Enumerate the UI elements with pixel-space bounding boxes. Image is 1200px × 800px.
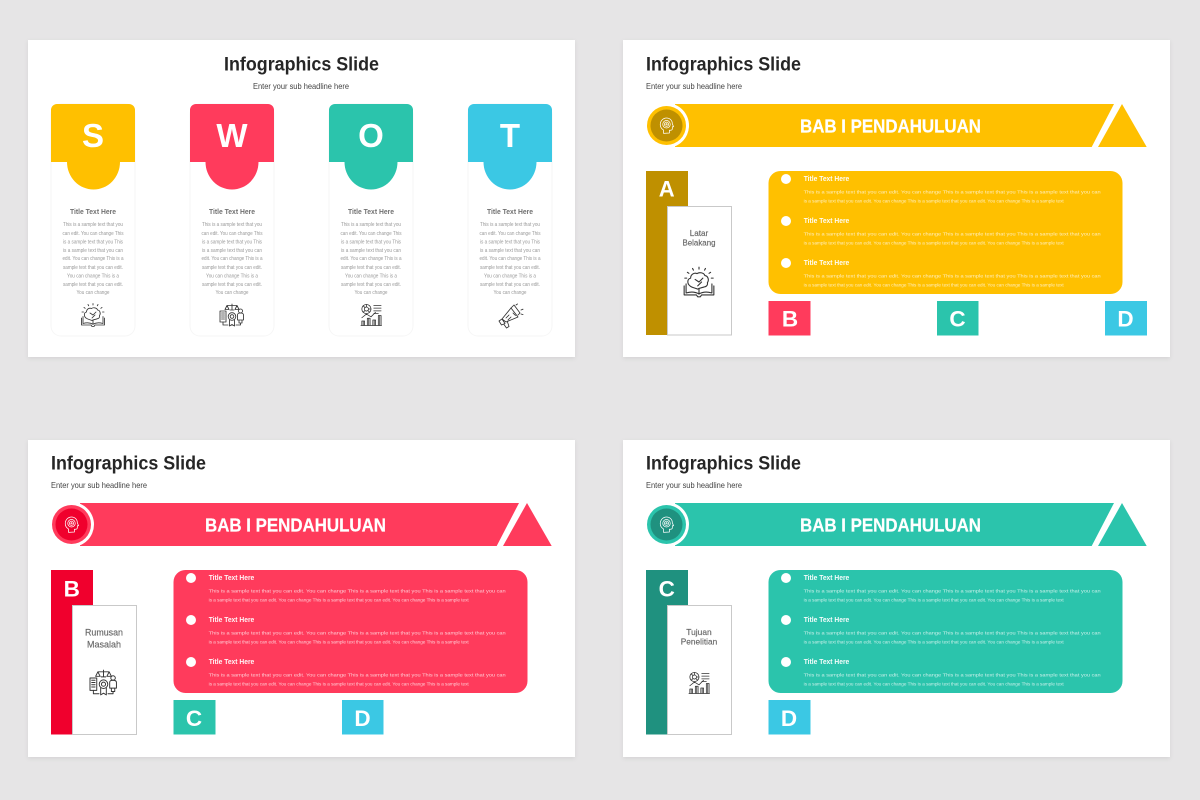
card: O opportunities: is a sample text that you This <box>341 240 401 246</box>
tab B: Masalah <box>87 639 121 650</box>
content panel: Title Text Here <box>804 216 849 225</box>
card: S strengths: is a sample text that you can <box>63 248 123 254</box>
card: T threats: is a sample text that you can <box>480 248 540 254</box>
card: T threats: T <box>500 117 520 154</box>
tab D: D <box>781 706 797 731</box>
content panel <box>174 570 528 693</box>
icon: head target <box>660 517 674 532</box>
content panel <box>768 570 1122 693</box>
tab D <box>342 700 384 734</box>
tab B: Rumusan <box>85 628 123 639</box>
banner: BAB I PENDAHULUAN <box>800 116 981 137</box>
banner <box>644 502 1147 547</box>
tab C: C <box>949 306 966 332</box>
content panel: is a sample text that you can edit. You can change This is a sample text that you can edit. You can change This is a sample text <box>804 240 1064 245</box>
icon: head target <box>660 118 674 133</box>
tab B <box>768 301 810 336</box>
tab D <box>768 700 810 734</box>
icon: megaphone <box>499 304 523 328</box>
tab B: B <box>782 306 798 332</box>
card: O opportunities: O <box>358 117 384 154</box>
tab A: Belakang <box>682 238 716 248</box>
tab B <box>51 570 136 734</box>
card: W weaknesses: edit. You can change This is a <box>202 256 262 262</box>
content panel: This is a sample text that you can edit. You can change This is a sample text that you This is a sample text that you can <box>804 274 1101 278</box>
card: O opportunities: edit. You can change This is a <box>340 256 402 262</box>
content panel: Title Text Here <box>209 657 254 666</box>
subtitle: Enter your sub headline here <box>646 81 742 91</box>
tab A <box>646 171 732 335</box>
panel: teal slide C <box>623 440 1170 757</box>
icon: brain on book <box>82 304 104 326</box>
card: O opportunities: You can change <box>354 290 388 296</box>
banner <box>49 502 552 547</box>
content panel: is a sample text that you can edit. You can change This is a sample text that you can edit. You can change This is a sample text <box>209 681 469 686</box>
title: Infographics Slide <box>51 454 206 474</box>
subtitle: Enter your sub headline here <box>646 480 742 490</box>
tab C: Tujuan <box>686 627 712 637</box>
card: O opportunities <box>329 104 413 336</box>
content panel: Title Text Here <box>804 657 849 666</box>
card: S strengths: can edit. You can change This <box>62 231 124 237</box>
subtitle: Enter your sub headline here <box>253 81 349 91</box>
tab C <box>174 700 216 734</box>
content panel: This is a sample text that you can edit. You can change This is a sample text that you This is a sample text that you can <box>804 588 1101 594</box>
panel: yellow slide A <box>623 40 1170 357</box>
tab C: Penelitian <box>681 637 717 647</box>
banner: BAB I PENDAHULUAN <box>205 515 386 536</box>
tab B: B <box>64 576 80 601</box>
icon: analytics chart <box>689 672 710 694</box>
content panel: is a sample text that you can edit. You can change This is a sample text that you can edit. You can change This is a sample text <box>804 639 1064 644</box>
card: T threats: edit. You can change This is a <box>480 256 540 262</box>
card: W weaknesses: Title Text Here <box>209 207 255 216</box>
card: T threats: Title Text Here <box>487 207 533 216</box>
card: S strengths: edit. You can change This is a <box>62 256 124 262</box>
card: W weaknesses: You can change This is a <box>206 274 258 280</box>
tab C <box>937 301 978 336</box>
tab A: A <box>659 177 675 202</box>
card: T threats <box>468 104 552 336</box>
banner: BAB I PENDAHULUAN <box>800 515 981 536</box>
card: O opportunities: Title Text Here <box>348 207 394 216</box>
title: Infographics Slide <box>646 454 801 474</box>
tab A: Latar <box>690 228 708 238</box>
card: S strengths: This is a sample text that you <box>63 222 123 228</box>
tab C: C <box>186 706 202 731</box>
tab C: C <box>659 576 675 601</box>
card: O opportunities: You can change This is a <box>345 274 397 280</box>
icon: justice <box>90 670 116 695</box>
card: O opportunities: is a sample text that you can <box>341 248 401 254</box>
content panel: Title Text Here <box>209 615 254 624</box>
content panel: Title Text Here <box>804 573 849 582</box>
tab D: D <box>1117 306 1134 332</box>
card: O opportunities: This is a sample text that you <box>341 222 401 228</box>
card: S strengths: You can change <box>76 290 110 296</box>
card: S strengths: Title Text Here <box>70 207 116 216</box>
content panel: Title Text Here <box>209 573 254 582</box>
content panel: is a sample text that you can edit. You can change This is a sample text that you can edit. You can change This is a sample text <box>804 198 1064 203</box>
card: S strengths: sample text that you can edit. <box>63 265 123 271</box>
card: W weaknesses: You can change <box>216 290 249 296</box>
card: S strengths: S <box>82 117 104 154</box>
card: W weaknesses: sample text that you can edit. <box>202 282 262 288</box>
panel: SWOT slide <box>28 40 575 357</box>
tab D <box>1105 301 1147 336</box>
card: T threats: sample text that you can edit. <box>480 282 540 288</box>
content panel: is a sample text that you can edit. You can change This is a sample text that you can edit. You can change This is a sample text <box>209 597 469 602</box>
content panel: This is a sample text that you can edit. You can change This is a sample text that you This is a sample text that you can <box>804 672 1101 678</box>
content panel: This is a sample text that you can edit. You can change This is a sample text that you This is a sample text that you can <box>804 190 1101 194</box>
content panel: This is a sample text that you can edit. You can change This is a sample text that you This is a sample text that you can <box>804 232 1101 236</box>
content panel: Title Text Here <box>804 174 849 183</box>
card: W weaknesses <box>190 104 274 336</box>
card: W weaknesses: W <box>216 117 248 154</box>
card: T threats: You can change This is a <box>484 274 536 280</box>
card: T threats: You can change <box>494 290 527 296</box>
content panel: Title Text Here <box>804 258 849 267</box>
title: Infographics Slide <box>224 54 379 76</box>
subtitle: Enter your sub headline here <box>51 480 147 490</box>
banner <box>644 103 1147 148</box>
icon: brain on book <box>684 267 714 297</box>
content panel <box>768 171 1122 294</box>
card: S strengths: sample text that you can edit. <box>63 282 123 288</box>
panel: red slide B <box>28 440 575 757</box>
content panel: This is a sample text that you can edit. You can change This is a sample text that you This is a sample text that you can <box>209 672 506 678</box>
content panel: is a sample text that you can edit. You can change This is a sample text that you can edit. You can change This is a sample text <box>209 639 469 644</box>
card: T threats: is a sample text that you This <box>480 240 540 246</box>
card: W weaknesses: can edit. You can change This <box>202 231 263 237</box>
card: T threats: can edit. You can change This <box>480 231 541 237</box>
icon: head target <box>65 517 79 532</box>
content panel: This is a sample text that you can edit. You can change This is a sample text that you This is a sample text that you can <box>209 588 506 594</box>
card: W weaknesses: sample text that you can edit. <box>202 265 262 271</box>
card: S strengths: is a sample text that you This <box>63 240 123 246</box>
tab D: D <box>354 706 371 731</box>
card: W weaknesses: is a sample text that you can <box>202 248 262 254</box>
content panel: This is a sample text that you can edit. You can change This is a sample text that you This is a sample text that you can <box>804 630 1101 636</box>
content panel: is a sample text that you can edit. You can change This is a sample text that you can edit. You can change This is a sample text <box>804 282 1064 287</box>
content panel: is a sample text that you can edit. You can change This is a sample text that you can edit. You can change This is a sample text <box>804 597 1064 602</box>
tab C <box>646 570 732 734</box>
card: O opportunities: sample text that you can edit. <box>341 265 401 271</box>
card: T threats: sample text that you can edit. <box>480 265 540 271</box>
content panel: This is a sample text that you can edit. You can change This is a sample text that you This is a sample text that you can <box>209 630 506 636</box>
content panel: Title Text Here <box>804 615 849 624</box>
title: Infographics Slide <box>646 54 801 76</box>
card: O opportunities: can edit. You can change This <box>340 231 402 237</box>
card: T threats: This is a sample text that you <box>480 222 540 228</box>
content panel: is a sample text that you can edit. You can change This is a sample text that you can edit. You can change This is a sample text <box>804 681 1064 686</box>
icon: analytics chart <box>361 304 382 326</box>
card: S strengths: You can change This is a <box>67 274 119 280</box>
icon: justice <box>220 304 244 326</box>
card: O opportunities: sample text that you can edit. <box>341 282 401 288</box>
card: W weaknesses: is a sample text that you This <box>202 240 262 246</box>
card: S strengths <box>51 104 135 336</box>
card: W weaknesses: This is a sample text that you <box>202 222 262 228</box>
